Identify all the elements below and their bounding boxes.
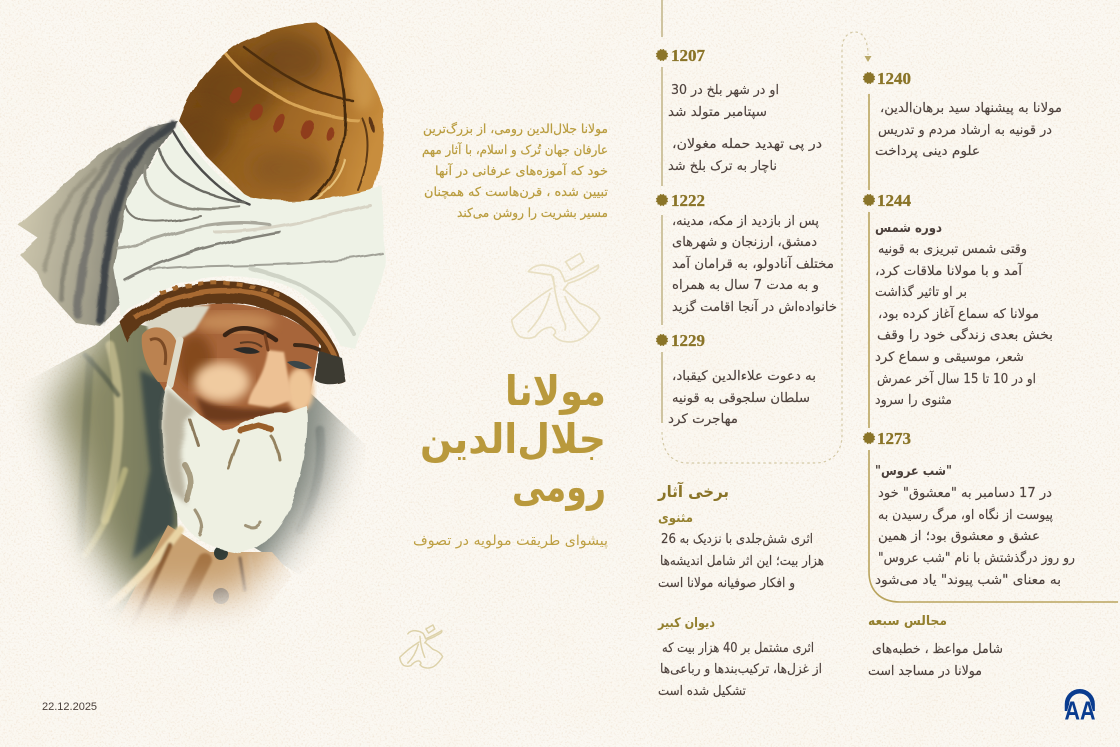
event: 1207: در پی تهدید حمله مغولان، bbox=[672, 137, 822, 152]
work: Masnavi: اثری شش‌جلدی با نزدیک به 26 bbox=[661, 532, 813, 547]
event: 1273: 1273 bbox=[877, 429, 911, 448]
work: Masnavi bbox=[658, 511, 824, 591]
intro paragraph: مولانا جلال‌الدین رومی، از بزرگ‌ترین bbox=[423, 121, 608, 137]
event: 1273: پیوست از نگاه او، مرگ رسیدن به bbox=[878, 506, 1053, 523]
work: Majales-e Sab'a: شامل مواعظ ، خطبه‌های bbox=[872, 642, 1003, 657]
event: 1240: مولانا به پیشنهاد سید برهان‌الدین، bbox=[880, 101, 1062, 116]
work: Majales-e Sab'a bbox=[868, 614, 1003, 679]
event: 1229: 1229 bbox=[671, 331, 705, 350]
work: Divan-e Kabir bbox=[657, 616, 822, 699]
title bbox=[420, 367, 606, 512]
event: 1207: 1207 bbox=[671, 46, 706, 65]
work: Divan-e Kabir: اثری مشتمل بر 40 هزار بیت که bbox=[662, 641, 814, 656]
intro paragraph: مسیر بشریت را روشن می‌کند bbox=[457, 205, 608, 221]
event: 1222: مختلف آنادولو، به قرامان آمد bbox=[672, 255, 834, 272]
timeline line: second column bbox=[869, 94, 1118, 602]
marker bbox=[656, 49, 668, 61]
event: 1273 bbox=[863, 429, 1075, 588]
dervish illustration, small bbox=[400, 625, 443, 668]
event: 1229: سلطان سلجوقی به قونیه bbox=[672, 391, 810, 406]
work: Divan-e Kabir: تشکیل شده است bbox=[658, 684, 746, 699]
event: 1222: خانواده‌اش در آنجا اقامت گزید bbox=[672, 298, 837, 315]
cap band bbox=[120, 281, 346, 385]
intro paragraph bbox=[422, 121, 609, 221]
portrait of Rumi bbox=[0, 23, 385, 645]
event: 1222: پس از بازدید از مکه، مدینه، bbox=[672, 214, 819, 229]
event: 1244: وقتی شمس تبریزی به قونیه bbox=[878, 242, 1027, 257]
event: 1229: مهاجرت کرد bbox=[668, 412, 738, 427]
event: 1244: شعر، موسیقی و سماع کرد bbox=[875, 350, 1024, 365]
intro paragraph: تبیین شده ، قرن‌هاست که همچنان bbox=[424, 184, 609, 200]
beard bbox=[162, 385, 307, 553]
event: 1240 bbox=[863, 69, 1062, 159]
event: 1273: در 17 دسامبر به "معشوق" خود bbox=[878, 486, 1052, 501]
cap dome bbox=[170, 23, 384, 210]
intro paragraph: عارفان جهان تُرک و اسلام، با آثار مهم bbox=[422, 142, 608, 158]
marker bbox=[656, 334, 668, 346]
event: 1244: دوره شمس bbox=[875, 221, 942, 236]
subtitle: پیشوای طریقت مولویه در تصوف bbox=[413, 533, 608, 549]
event: 1207: سپتامبر متولد شد bbox=[668, 105, 767, 120]
intro paragraph: خود که آموزه‌های عرفانی در آنها bbox=[435, 163, 608, 179]
white turban bbox=[114, 125, 385, 350]
marker bbox=[656, 194, 668, 206]
turban tail bbox=[18, 121, 178, 326]
event: 1240: 1240 bbox=[877, 69, 911, 88]
marker bbox=[863, 194, 875, 206]
event: 1244: مثنوی را سرود bbox=[875, 393, 952, 408]
event: 1244: آمد و با مولانا ملاقات کرد، bbox=[875, 262, 1023, 279]
event: 1222: 1222 bbox=[671, 191, 705, 210]
work: Divan-e Kabir: دیوان کبیر bbox=[657, 616, 715, 631]
face bbox=[148, 304, 320, 432]
event: 1240: در قونیه به ارشاد مردم و تدریس bbox=[878, 123, 1052, 138]
event: 1229 bbox=[656, 331, 816, 427]
event: 1229: به دعوت علاءالدین کیقباد، bbox=[672, 369, 816, 384]
event: 1273: "شب عروس" bbox=[875, 464, 952, 479]
event: 1273: عشق و معشوق بود؛ از همین bbox=[878, 529, 1040, 544]
marker bbox=[863, 72, 875, 84]
dashed connector between columns bbox=[662, 32, 872, 463]
marker bbox=[863, 432, 875, 444]
event: 1244: 1244 bbox=[877, 191, 912, 210]
robe and shirt bbox=[29, 324, 359, 626]
event: 1207 bbox=[656, 46, 822, 174]
event: 1207: ناچار به ترک بلخ شد bbox=[668, 159, 777, 174]
title: مولانا bbox=[505, 367, 606, 415]
event: 1244 bbox=[863, 191, 1053, 408]
event: 1244: بخش بعدی زندگی خود را وقف bbox=[877, 327, 1053, 343]
ear and hair bbox=[142, 305, 210, 385]
works heading: برخی آثار bbox=[657, 481, 729, 501]
logo: Anadolu Agency: AA bbox=[1064, 696, 1096, 726]
title: جلال‌الدین bbox=[420, 415, 606, 463]
work: Masnavi: هزار بیت؛ این اثر شامل اندیشه‌ها bbox=[660, 554, 824, 569]
event: 1222: دمشق، ارزنجان و شهرهای bbox=[672, 235, 817, 250]
event: 1273: رو روز درگذشتش با نام "شب عروس" bbox=[878, 550, 1075, 566]
event: 1207: او در شهر بلخ در 30 bbox=[671, 83, 779, 98]
event: 1240: علوم دینی پرداخت bbox=[875, 144, 980, 159]
title: رومی bbox=[512, 463, 606, 512]
date: 22.12.2025 bbox=[42, 701, 97, 713]
event: 1244: مولانا که سماع آغاز کرده بود، bbox=[878, 305, 1039, 322]
work: Masnavi: و افکار صوفیانه مولانا است bbox=[658, 576, 795, 591]
work: Divan-e Kabir: از غزل‌ها، ترکیب‌بندها و رباعی‌ها bbox=[660, 662, 822, 677]
event: 1244: بر او تاثیر گذاشت bbox=[875, 284, 967, 300]
work: Majales-e Sab'a: مجالس سبعه bbox=[868, 614, 947, 629]
event: 1222: و به مدت 7 سال به همراه bbox=[672, 278, 819, 293]
event: 1222 bbox=[656, 191, 837, 315]
event: 1273: به معنای "شب پیوند" یاد می‌شود bbox=[875, 573, 1061, 588]
work: Masnavi: مثنوی bbox=[658, 511, 693, 526]
dervish illustration, large bbox=[512, 253, 600, 342]
timeline line: first column bbox=[661, 0, 663, 423]
event: 1244: او در 10 تا 15 سال آخر عمرش bbox=[877, 370, 1036, 387]
work: Majales-e Sab'a: مولانا در مساجد است bbox=[868, 664, 982, 679]
